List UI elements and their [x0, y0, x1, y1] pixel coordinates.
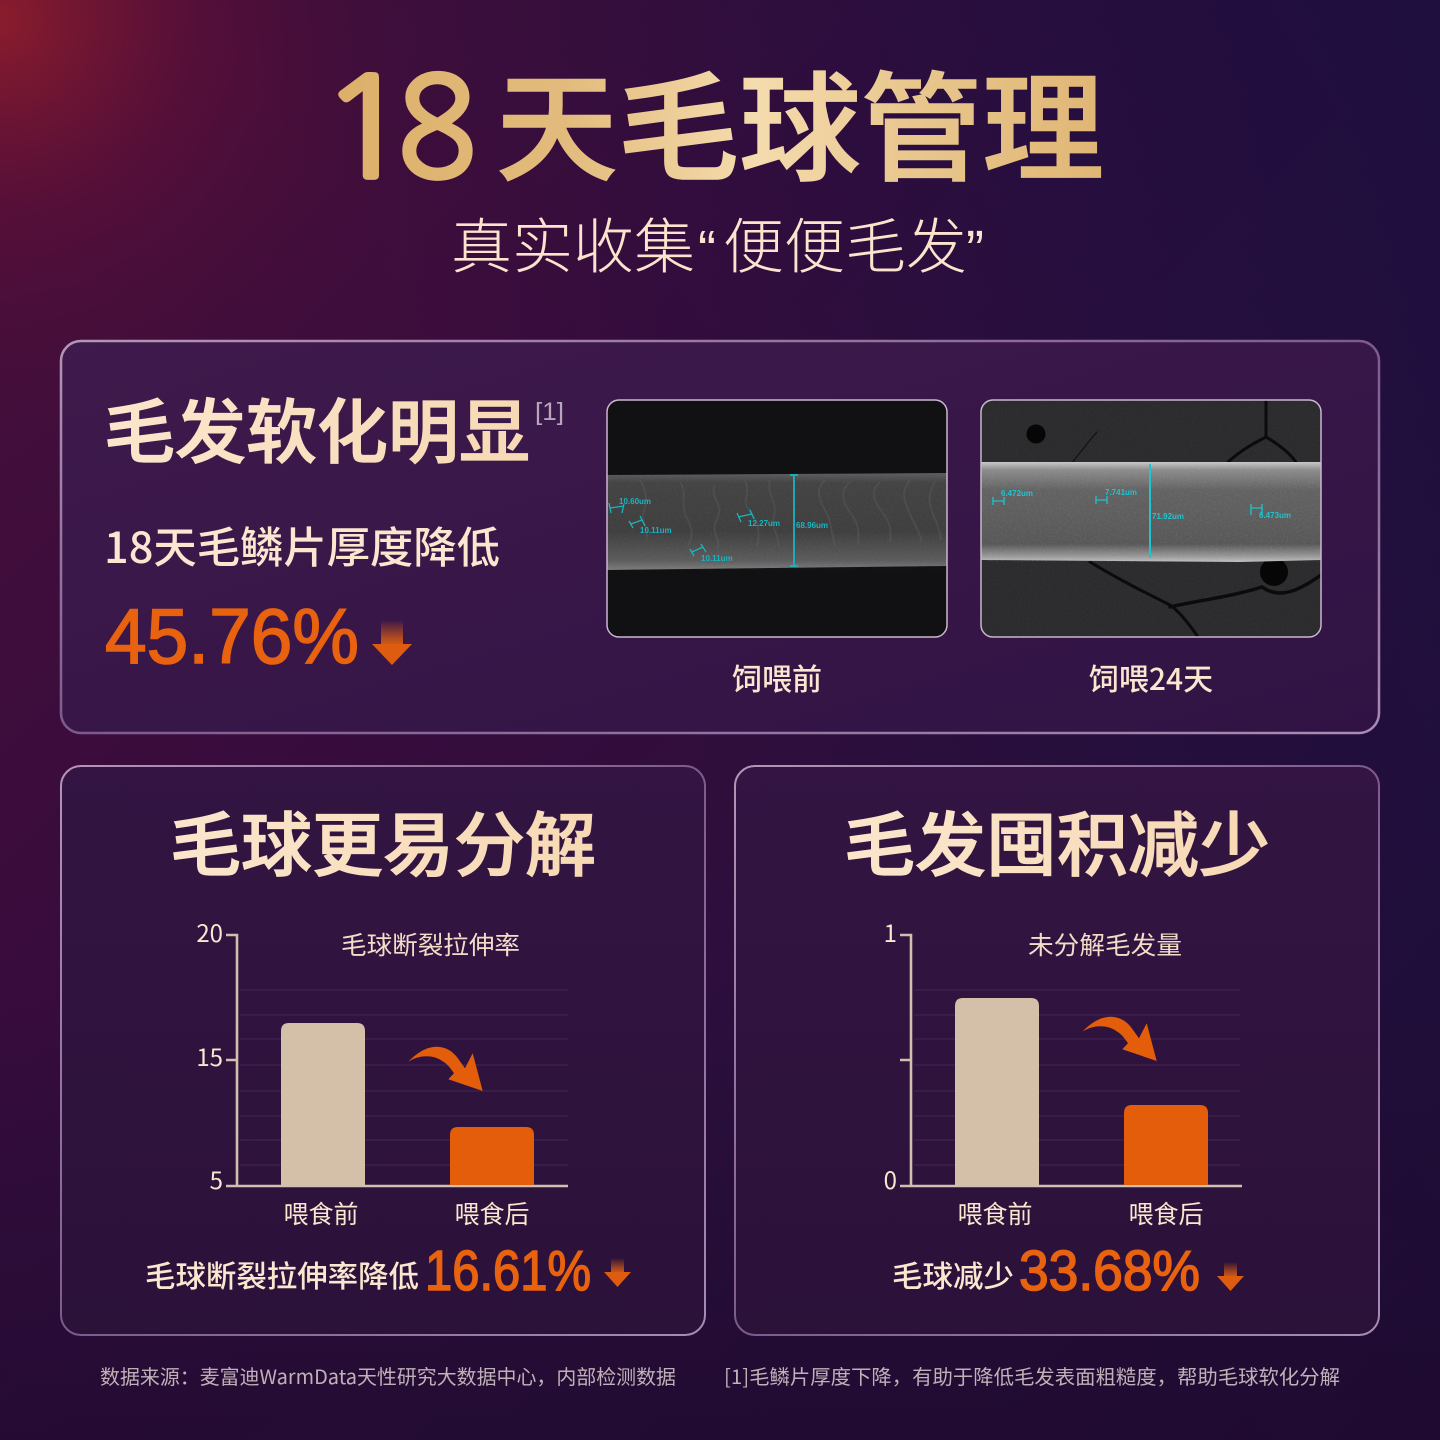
subtitle: 便便毛发 — [723, 199, 967, 286]
footnote: scale thickness: [1]毛鳞片厚度下降，有助于降低毛发表面粗糙度，帮助毛球软化分解 — [724, 1361, 1340, 1390]
stat: 33.68%: 33.68% — [1019, 1239, 1200, 1303]
bar: before — [955, 998, 1039, 1185]
chart title: 未分解毛发量 — [1028, 926, 1182, 962]
icon: down arrow — [372, 620, 412, 665]
photo: before feeding: 10.11um — [640, 526, 672, 535]
subtitle: “ — [698, 220, 716, 280]
bar chart: elongation at break: 20 — [196, 914, 223, 949]
bar chart: undigested hair — [884, 914, 1242, 1231]
panel: hair accumulation — [735, 766, 1379, 1335]
panel: hairball breakdown — [61, 766, 705, 1335]
photo: after 24 days: 71.92um — [1152, 512, 1184, 521]
panel: hair softening — [61, 341, 1379, 733]
title: 1 — [319, 59, 413, 197]
label: after: 喂食后 — [1128, 1195, 1204, 1231]
photo: before feeding: 12.27um — [748, 519, 780, 528]
heading: hair softening: 毛发软化明显 — [104, 377, 530, 478]
subtitle: ” — [966, 220, 984, 280]
photo: after 24 days: 7.741um — [1105, 488, 1137, 497]
bar: before — [281, 1023, 365, 1185]
stat: 16.61%: 16.61% — [425, 1239, 591, 1303]
footnote: data source: 数据来源：麦富迪WarmData天性研究大数据中心，内部检测数据 — [100, 1361, 676, 1390]
bar chart: elongation at break: 15 — [196, 1038, 223, 1073]
text: scale thickness: 18天毛鳞片厚度降低 — [104, 514, 500, 576]
arrow — [1082, 1017, 1157, 1061]
photo: before feeding: 68.96um — [796, 521, 828, 530]
photo: after 24 days — [981, 400, 1321, 640]
text: elongation reduced: 毛球断裂拉伸率降低 — [145, 1252, 419, 1296]
subtitle: 真实收集 — [451, 199, 695, 286]
icon: down arrow — [604, 1258, 631, 1287]
bar: after — [450, 1127, 534, 1185]
photo: before feeding: 10.60um — [619, 497, 651, 506]
title: 天毛球管理 — [496, 34, 1104, 205]
bar chart: elongation at break: 5 — [210, 1161, 223, 1196]
photo: before feeding: 10.11um — [701, 554, 733, 563]
bar: after — [1124, 1105, 1208, 1185]
arrow — [408, 1047, 483, 1091]
heading: hair accumulation: 毛发囤积减少 — [844, 790, 1270, 891]
heading: hairball breakdown: 毛球更易分解 — [170, 790, 596, 891]
bar chart: undigested hair: 0 — [884, 1161, 897, 1196]
label: after: 喂食后 — [454, 1195, 530, 1231]
bar chart: elongation at break — [196, 914, 568, 1231]
footnote marker: [1] — [535, 398, 564, 426]
stat: 45.76%: 45.76% — [105, 592, 359, 680]
subtitle — [451, 199, 984, 286]
caption: before feeding: 饲喂前 — [732, 655, 822, 699]
text: hairball reduced: 毛球减少 — [892, 1252, 1014, 1296]
label: before: 喂食前 — [283, 1195, 359, 1231]
photo: after 24 days: 6.472um — [1001, 489, 1033, 498]
photo: before feeding — [607, 400, 947, 637]
photo: after 24 days: 6.473um — [1259, 511, 1291, 520]
chart title: 毛球断裂拉伸率 — [341, 926, 520, 962]
title: 8 — [397, 59, 477, 197]
icon: down arrow — [1217, 1262, 1244, 1291]
label: before: 喂食前 — [957, 1195, 1033, 1231]
bar chart: undigested hair: 1 — [884, 914, 897, 949]
caption: after 24 days: 饲喂24天 — [1089, 655, 1213, 699]
